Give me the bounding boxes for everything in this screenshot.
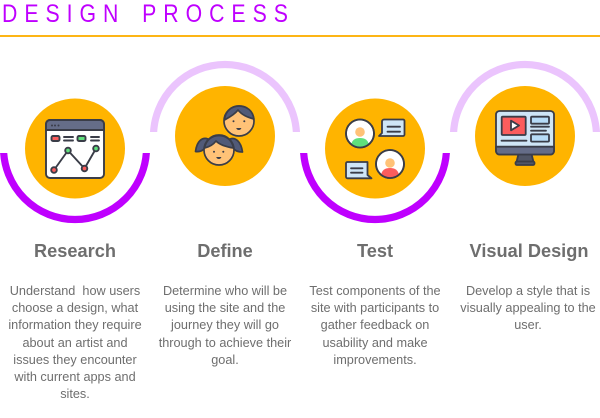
text: test: gather feedback on	[321, 318, 429, 332]
heading: test: Test	[357, 241, 393, 261]
text: research: sites.	[60, 387, 90, 401]
circle: research	[25, 98, 125, 198]
text: test: improvements.	[333, 353, 417, 367]
arc: define	[150, 60, 300, 132]
text: define: Determine who will be	[163, 284, 287, 298]
icon: video monitor	[496, 111, 554, 165]
title rule	[0, 35, 600, 37]
arc: test	[300, 153, 450, 224]
text: research: Understand how users	[10, 284, 140, 298]
icon: two children faces	[196, 106, 254, 165]
text: visual design: user.	[514, 318, 542, 332]
text: research: information they require	[8, 318, 142, 332]
heading: visual design: Visual Design	[470, 241, 588, 261]
text: define: goal.	[211, 353, 239, 367]
circle: visual design	[475, 86, 575, 186]
circle: test	[325, 98, 425, 198]
icon: analytics window	[46, 120, 104, 178]
text: visual design	[460, 284, 596, 332]
text: define: through to achieve their	[159, 336, 291, 350]
text: visual design: Develop a style that is	[466, 284, 590, 298]
text: test: usability and make	[322, 336, 428, 350]
text: research: with current apps and	[14, 370, 136, 384]
title: DESIGN PROCESS	[2, 0, 294, 28]
text: define: journey they will go	[171, 318, 279, 332]
heading: define: Define	[197, 241, 253, 261]
text: visual design: visually appealing to the	[460, 301, 596, 315]
text: test	[309, 284, 441, 367]
process graphics	[0, 60, 600, 224]
text: test: site with participants to	[311, 301, 439, 315]
text: research: about an artist and	[22, 336, 128, 350]
text: define: using the site and the	[165, 301, 285, 315]
text: test: Test components of the	[309, 284, 441, 298]
text: research: issues they encounter	[13, 353, 137, 367]
text: research	[8, 284, 142, 401]
icon: users and chat bubbles	[346, 120, 404, 178]
text: research: choose a design, what	[12, 301, 138, 315]
heading: research: Research	[34, 241, 116, 261]
circle: define	[175, 86, 275, 186]
arc: research	[0, 153, 150, 224]
text: define	[158, 284, 291, 367]
arc: visual design	[450, 60, 600, 132]
